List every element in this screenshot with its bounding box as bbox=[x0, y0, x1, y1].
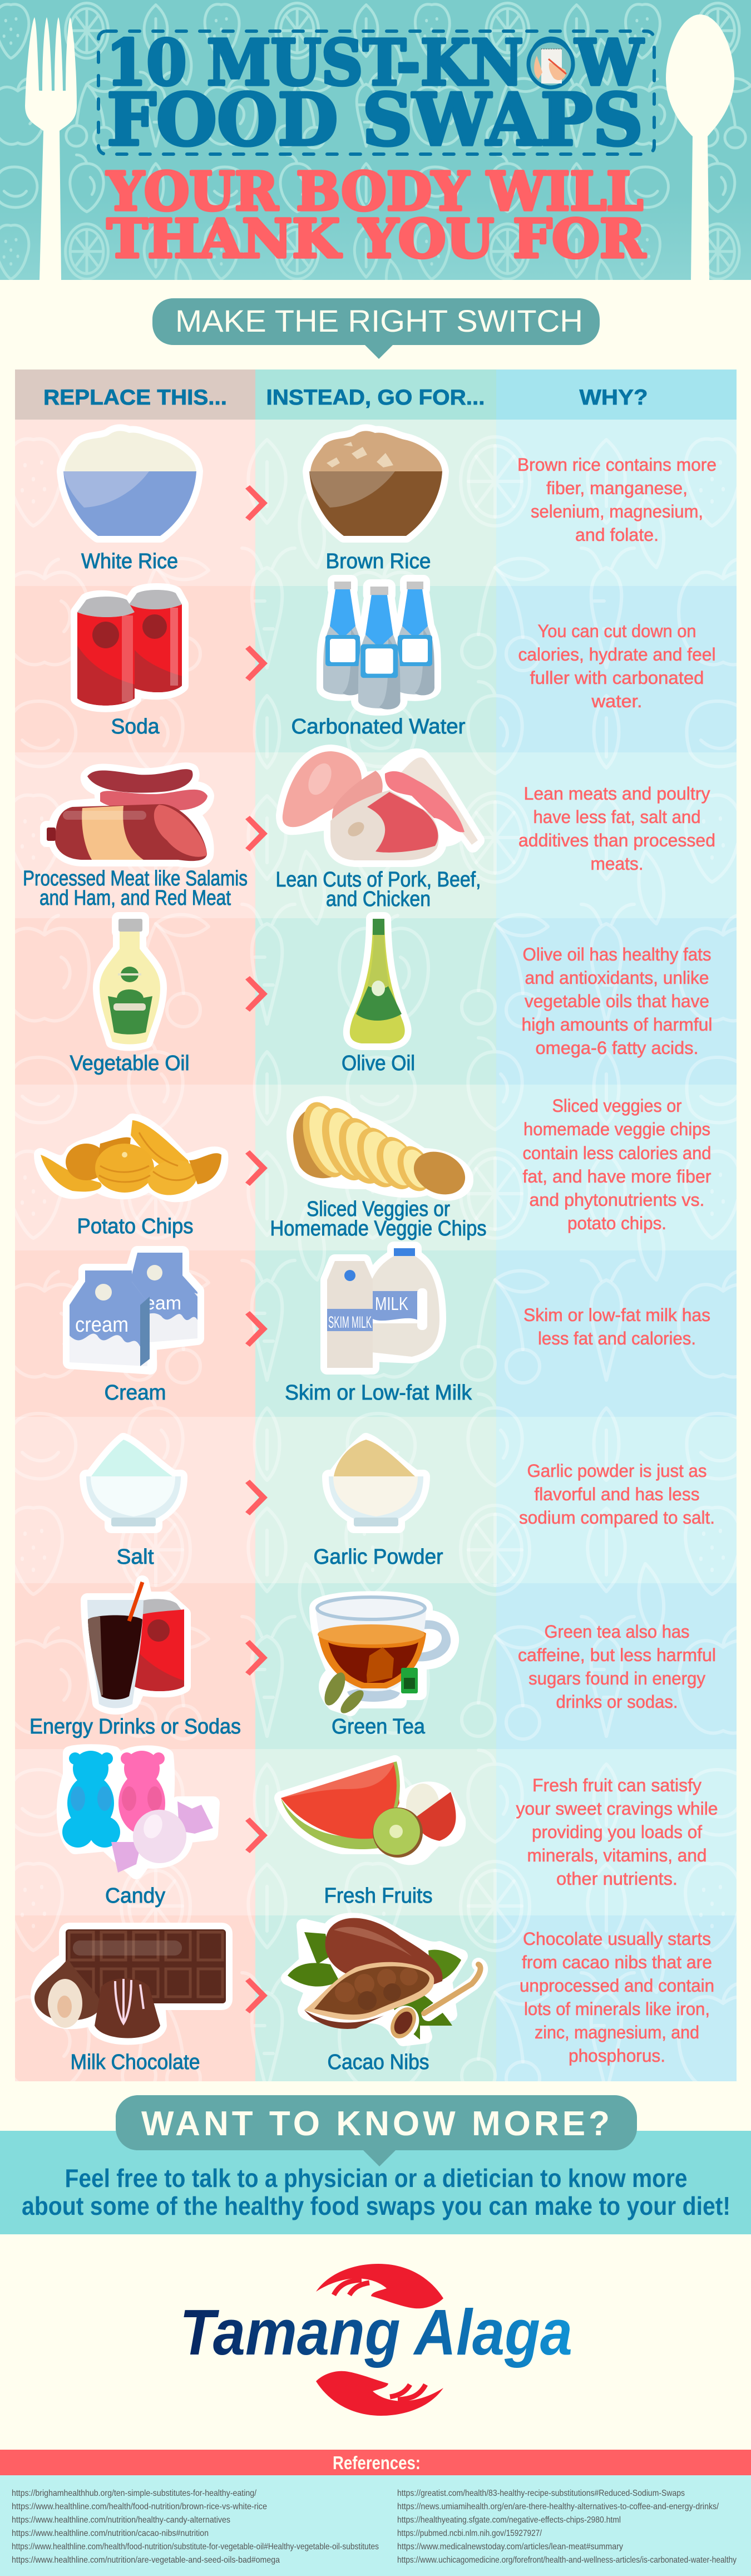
reference list: left column: https://www.healthline.com/health/food-nutrition/brown-rice-vs-white-rice bbox=[12, 2502, 267, 2511]
label: salt: Salt bbox=[117, 1545, 154, 1569]
label: soda: Soda bbox=[111, 715, 160, 738]
table header row bbox=[43, 386, 648, 410]
heading pill: make the right switch bbox=[152, 298, 600, 359]
why text: homemade veggie chips bbox=[523, 1119, 710, 1139]
icon: fresh fruits bbox=[281, 1762, 459, 1865]
why text: vegetable oils that have bbox=[525, 991, 709, 1011]
why text: other nutrients. bbox=[556, 1869, 678, 1889]
heading pill: want to know more bbox=[116, 2095, 637, 2166]
why text: Green tea also has bbox=[544, 1622, 690, 1642]
icon: vegetable oil bottle bbox=[100, 919, 160, 1044]
icon: cream cartons: eam bbox=[145, 1293, 181, 1314]
why text: sugars found in energy bbox=[528, 1668, 705, 1688]
why text bbox=[518, 621, 715, 711]
icon: top hand bbox=[316, 2264, 443, 2308]
icon: gummy bears and candy bbox=[62, 1751, 213, 1873]
why text: contain less calories and bbox=[523, 1143, 711, 1163]
row 2: soda to carbonated water bbox=[77, 582, 715, 738]
icon: notebook and hand in the letter O bbox=[528, 41, 573, 87]
icon: lean meats bbox=[283, 751, 478, 860]
why text bbox=[518, 1622, 716, 1712]
why text: drinks or sodas. bbox=[556, 1692, 678, 1712]
why text: additives than processed bbox=[518, 830, 715, 850]
icon: white rice bowl bbox=[63, 431, 196, 536]
arrow bbox=[245, 976, 268, 1012]
logo wordmark: Tamang Alaga bbox=[180, 2296, 572, 2368]
icon: olive oil bottle bbox=[350, 919, 405, 1043]
label: lean cuts: Lean Cuts of Pork, Beef, bbox=[276, 868, 481, 891]
title: 10 must-know: 10 MUST-KN bbox=[106, 27, 523, 100]
label: cacao nibs: Cacao Nibs bbox=[327, 2051, 429, 2074]
reference list: right column bbox=[397, 2489, 737, 2565]
title: food swaps: FOOD SWAPS bbox=[107, 78, 643, 162]
why text bbox=[518, 784, 715, 874]
icon: energy drink glass and can bbox=[87, 1582, 184, 1708]
title: 10 must-know: O bbox=[528, 27, 573, 100]
reference list: left column bbox=[12, 2489, 379, 2565]
body text: Feel free to talk to a physician or a dietician to know more bbox=[65, 2164, 688, 2193]
icon: cream cartons: cream bbox=[75, 1313, 129, 1337]
row 7: salt to garlic powder bbox=[86, 1440, 715, 1569]
arrow bbox=[245, 646, 268, 681]
why text: Chocolate usually starts bbox=[523, 1929, 711, 1949]
row 8: energy drinks to green tea bbox=[29, 1582, 716, 1738]
icon: garlic powder bowl bbox=[329, 1440, 423, 1526]
why text: minerals, vitamins, and bbox=[527, 1845, 706, 1865]
why text bbox=[516, 1775, 718, 1889]
row 1: white rice to brown rice bbox=[63, 431, 717, 573]
why text: Fresh fruit can satisfy bbox=[532, 1775, 701, 1795]
why text bbox=[519, 1461, 715, 1528]
why text: sodium compared to salt. bbox=[519, 1508, 715, 1528]
arrow bbox=[245, 1978, 268, 2013]
arrow bbox=[245, 1311, 268, 1347]
icon: brown rice bowl bbox=[309, 431, 442, 536]
why text bbox=[523, 1096, 712, 1233]
reference list: right column: https://greatist.com/health/83-healthy-recipe-substitutions#Reduced-Sodium-Swaps bbox=[397, 2489, 685, 2498]
why text: caffeine, but less harmful bbox=[518, 1645, 716, 1665]
why text: selenium, magnesium, bbox=[531, 501, 703, 521]
why text: and phytonutrients vs. bbox=[530, 1190, 704, 1210]
why text: Brown rice contains more bbox=[517, 455, 717, 475]
why text: water. bbox=[591, 691, 642, 711]
label: veggie chips bbox=[270, 1198, 486, 1240]
icon: milk chocolate bbox=[34, 1929, 226, 2038]
label: veggie chips: Homemade Veggie Chips bbox=[270, 1217, 486, 1240]
table background bbox=[15, 370, 737, 2081]
icon: milk carton and jug: SKIM MILK bbox=[328, 1313, 372, 1332]
reference list: left column: https://www.healthline.com/health/food-nutrition/substitute-for-vegetable-oil#Healthy-vegetable-oil-substitutes bbox=[12, 2542, 379, 2552]
arrow bbox=[245, 1480, 268, 1515]
icon: cream cartons bbox=[70, 1253, 197, 1368]
arrow bbox=[245, 1150, 268, 1186]
label: vegetable oil: Vegetable Oil bbox=[70, 1052, 189, 1075]
label: lean cuts bbox=[276, 868, 481, 911]
label: cream: Cream bbox=[105, 1381, 166, 1405]
label: milk chocolate: Milk Chocolate bbox=[70, 2051, 200, 2074]
why text: unprocessed and contain bbox=[520, 1976, 714, 1996]
dashed title frame bbox=[98, 31, 654, 154]
icon: carbonated water bottles bbox=[323, 582, 434, 710]
row 9: candy to fresh fruits bbox=[62, 1751, 718, 1908]
column heading: why: WHY? bbox=[580, 386, 648, 410]
why text: Sliced veggies or bbox=[552, 1096, 682, 1116]
label: candy: Candy bbox=[105, 1884, 165, 1908]
reference list: right column: https://news.umiamihealth.org/en/are-there-healthy-alternatives-to-coffee-and-energy-drinks/ bbox=[397, 2502, 719, 2511]
reference list: left column: https://www.healthline.com/nutrition/healthy-candy-alternatives bbox=[12, 2515, 230, 2525]
arrow bbox=[245, 485, 268, 521]
why text: fat, and have more fiber bbox=[523, 1166, 712, 1186]
why text: fuller with carbonated bbox=[530, 668, 704, 688]
label: fresh fruits: Fresh Fruits bbox=[324, 1884, 433, 1908]
arrow bbox=[245, 1818, 268, 1853]
label: processed meat: Processed Meat like Salamis bbox=[23, 867, 248, 890]
icon: spoon bbox=[666, 14, 734, 280]
label: garlic powder: Garlic Powder bbox=[314, 1545, 443, 1569]
row 6: cream to skim milk bbox=[70, 1248, 710, 1405]
why text: your sweet cravings while bbox=[516, 1799, 718, 1819]
panel: references bbox=[0, 2450, 751, 2576]
label: potato chips: Potato Chips bbox=[77, 1215, 194, 1238]
why text: calories, hydrate and feel bbox=[518, 644, 715, 664]
why text: flavorful and has less bbox=[534, 1484, 700, 1504]
why text: Lean meats and poultry bbox=[524, 784, 710, 804]
label: brown rice: Brown Rice bbox=[326, 550, 431, 573]
icon: sliced potato bbox=[293, 1096, 472, 1203]
why text bbox=[520, 1929, 714, 2066]
icon: potato chips bbox=[41, 1120, 221, 1199]
label: skim milk: Skim or Low-fat Milk bbox=[285, 1381, 472, 1405]
label: green tea: Green Tea bbox=[332, 1715, 426, 1738]
row 10: milk chocolate to cacao nibs bbox=[34, 1918, 714, 2074]
why text bbox=[522, 944, 712, 1058]
logo: tamang alaga bbox=[180, 2264, 572, 2416]
reference list: right column: https://www.medicalnewstoday.com/articles/lean-meat#summary bbox=[397, 2542, 623, 2552]
heading pill: want to know more: WANT TO KNOW MORE? bbox=[141, 2105, 610, 2143]
why text: potato chips. bbox=[567, 1213, 666, 1233]
why text: Garlic powder is just as bbox=[527, 1461, 706, 1481]
row 3: processed meat to lean cuts bbox=[23, 751, 715, 911]
label: energy drinks: Energy Drinks or Sodas bbox=[29, 1715, 241, 1738]
why text bbox=[523, 1305, 710, 1348]
label: white rice: White Rice bbox=[81, 550, 178, 573]
why text: have less fat, salt and bbox=[533, 807, 701, 827]
icon: soda cans bbox=[77, 590, 182, 706]
arrow bbox=[245, 1640, 268, 1676]
title: thank you for: THANK YOU FOR bbox=[107, 208, 646, 270]
label: lean cuts: and Chicken bbox=[326, 888, 431, 911]
why text: and antioxidants, unlike bbox=[525, 968, 709, 988]
arrow bbox=[245, 816, 268, 851]
why text: fiber, manganese, bbox=[546, 478, 688, 498]
icon: green tea cup bbox=[316, 1597, 452, 1717]
why text: meats. bbox=[591, 854, 643, 874]
panel: title banner bbox=[0, 0, 751, 280]
reference list: left column: https://www.healthline.com/nutrition/are-vegetable-and-seed-oils-bad#omega bbox=[12, 2555, 280, 2565]
heading pill: make the right switch: MAKE THE RIGHT SWITCH bbox=[175, 303, 583, 338]
panel: want to know more bbox=[0, 2095, 751, 2234]
why text: high amounts of harmful bbox=[522, 1014, 712, 1035]
icon: milk carton and jug bbox=[327, 1248, 439, 1368]
reference list: right column: https://pubmed.ncbi.nlm.nih.gov/15927927/ bbox=[397, 2529, 542, 2538]
why text: You can cut down on bbox=[537, 621, 696, 641]
title: your body will: YOUR BODY WILL bbox=[106, 161, 643, 223]
why text: lots of minerals like iron, bbox=[524, 1999, 710, 2019]
why text: providing you loads of bbox=[532, 1822, 702, 1842]
row 5: potato chips to veggie chips bbox=[41, 1096, 712, 1240]
why text: from cacao nibs that are bbox=[522, 1952, 712, 1972]
reference list: left column: https://www.healthline.com/nutrition/cacao-nibs#nutrition bbox=[12, 2529, 209, 2538]
icon: milk carton and jug: MILK bbox=[375, 1293, 408, 1314]
why text: Olive oil has healthy fats bbox=[523, 944, 711, 964]
why text: and folate. bbox=[575, 525, 659, 545]
icon: cacao pod bbox=[288, 1918, 481, 2046]
why text: zinc, magnesium, and bbox=[535, 2022, 699, 2042]
label: veggie chips: Sliced Veggies or bbox=[307, 1198, 450, 1221]
why text: phosphorus. bbox=[569, 2046, 665, 2066]
label: carbonated water: Carbonated Water bbox=[291, 715, 466, 738]
row 4: vegetable oil to olive oil bbox=[70, 919, 712, 1075]
reference list: right column: https://healthyeating.sfgate.com/negative-effects-chips-2980.html bbox=[397, 2515, 621, 2525]
heading: references: References: bbox=[333, 2452, 421, 2473]
why text: less fat and calories. bbox=[538, 1328, 696, 1348]
icon: processed meats bbox=[47, 769, 207, 861]
label: processed meat bbox=[23, 867, 248, 910]
column heading: instead go for: INSTEAD, GO FOR... bbox=[266, 386, 485, 410]
title: 10 must-know: W bbox=[575, 27, 644, 100]
body text bbox=[22, 2164, 730, 2220]
icon: bottom hand bbox=[316, 2371, 443, 2416]
why text: omega-6 fatty acids. bbox=[535, 1038, 699, 1058]
why text bbox=[517, 455, 717, 545]
icon: salt bowl bbox=[86, 1440, 181, 1526]
icon: fork bbox=[25, 17, 77, 280]
column heading: replace this: REPLACE THIS... bbox=[43, 386, 227, 410]
label: olive oil: Olive Oil bbox=[342, 1052, 415, 1075]
label: processed meat: and Ham, and Red Meat bbox=[39, 886, 231, 910]
reference list: left column: https://brighamhealthhub.org/ten-simple-substitutes-for-healthy-eating/ bbox=[12, 2489, 256, 2498]
why text: Skim or low-fat milk has bbox=[523, 1305, 710, 1325]
